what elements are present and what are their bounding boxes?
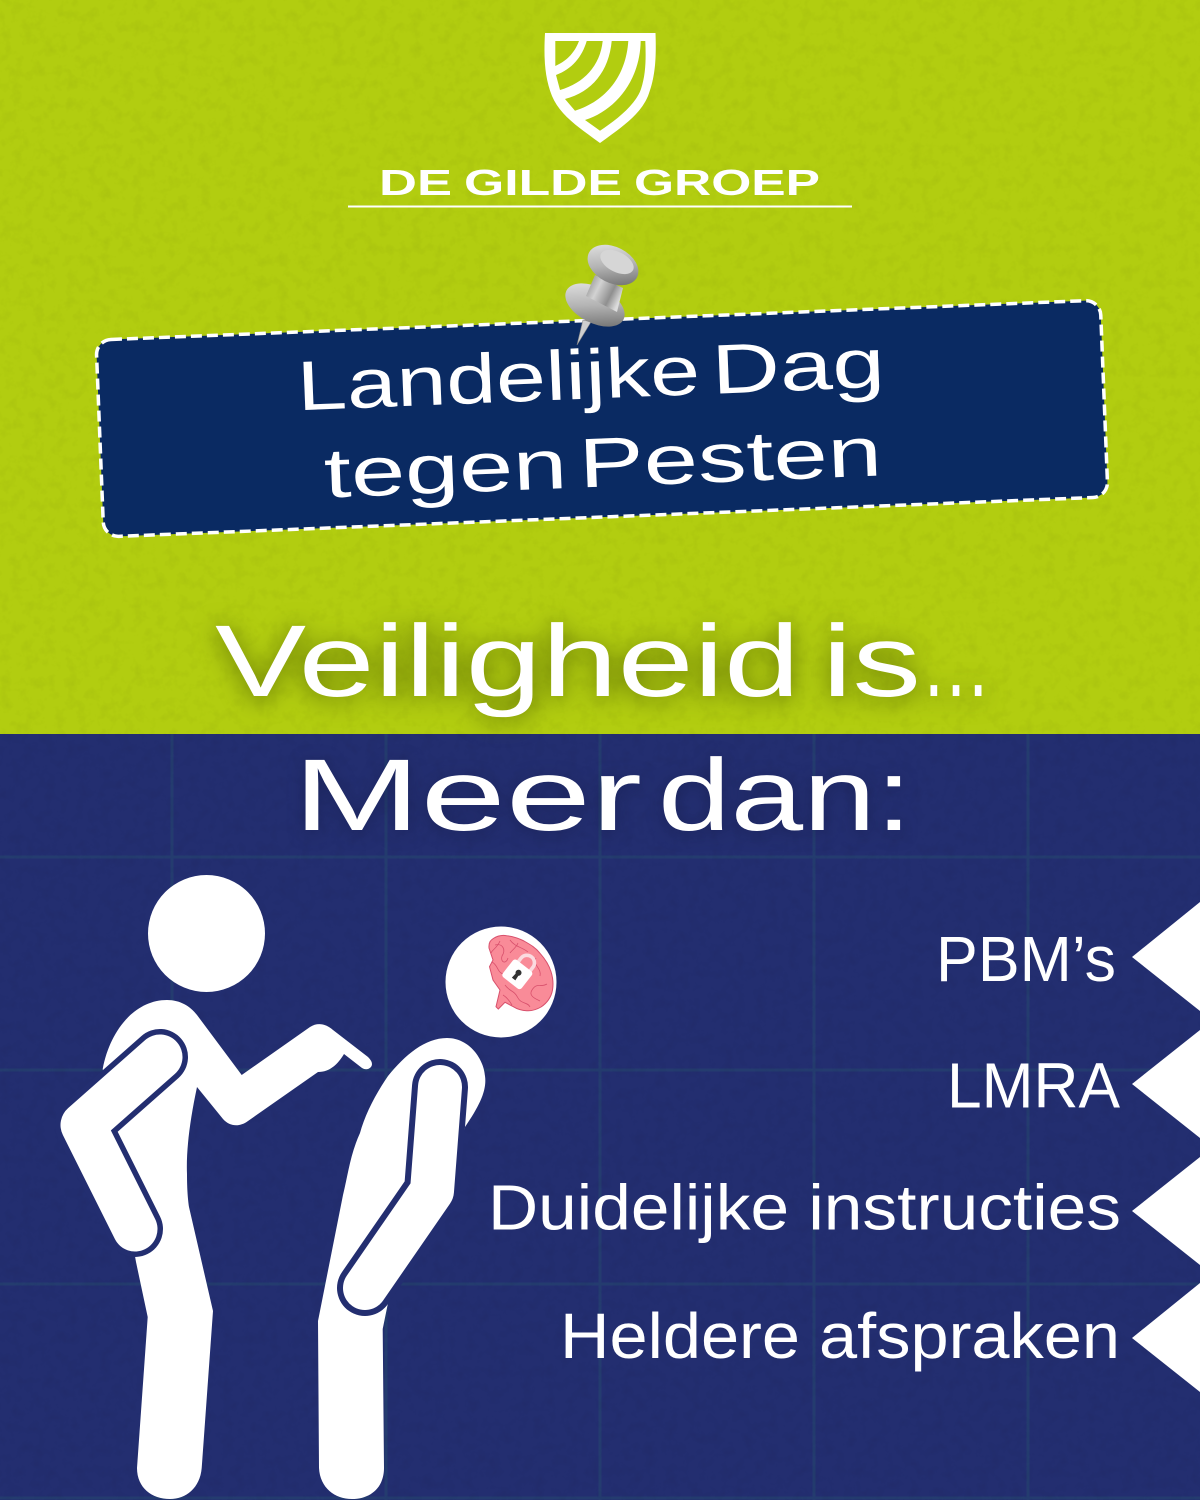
heading: Veiligheid is: Veiligheid bbox=[215, 604, 800, 718]
logo wordmark bbox=[379, 162, 820, 203]
icon: push pin bbox=[558, 237, 645, 345]
logo underline bbox=[348, 206, 852, 208]
label: Duidelijke instructies bbox=[488, 1172, 1121, 1244]
body bbox=[318, 1038, 485, 1499]
list item: LMRA bbox=[947, 1030, 1200, 1138]
label: PBM’s bbox=[936, 923, 1116, 995]
list item: Duidelijke instructies bbox=[488, 1157, 1200, 1265]
icon: shield bbox=[544, 33, 656, 143]
banner title: tegen bbox=[322, 425, 568, 513]
banner title: Landelijke bbox=[295, 331, 701, 425]
figure: person pointing bbox=[83, 875, 372, 1499]
label: LMRA bbox=[947, 1050, 1120, 1122]
heading: Meer dan: Meer bbox=[293, 738, 642, 852]
logo wordmark: GROEP bbox=[634, 162, 820, 203]
head bbox=[148, 875, 265, 992]
heading: Veiligheid is: is bbox=[822, 604, 921, 718]
panel: pinned title banner bbox=[96, 300, 1108, 537]
arrow bbox=[1132, 1030, 1200, 1138]
padlock bbox=[501, 949, 541, 990]
arrow bbox=[1132, 1157, 1200, 1265]
list item: PBM's bbox=[936, 902, 1200, 1011]
heading: Veiligheid is bbox=[215, 604, 991, 718]
arm on hip bbox=[83, 1057, 160, 1229]
panel: navy bottom background bbox=[0, 734, 1200, 1500]
icon: brain with padlock bbox=[489, 935, 553, 1011]
logo wordmark: GILDE bbox=[464, 162, 622, 203]
banner title bbox=[295, 324, 890, 514]
banner background bbox=[96, 300, 1108, 537]
heading: Meer dan: dan: bbox=[658, 738, 912, 852]
figure: bullied person bent over bbox=[318, 926, 556, 1499]
banner title: Dag bbox=[710, 324, 886, 409]
arrow bbox=[1132, 902, 1200, 1011]
logo: De Gilde Groep bbox=[348, 33, 852, 208]
logo wordmark: DE bbox=[379, 162, 452, 203]
heading: Veiligheid is: … bbox=[921, 604, 991, 718]
banner title: Pesten bbox=[577, 412, 883, 502]
panel: green top background bbox=[0, 0, 1200, 734]
body bbox=[103, 1000, 372, 1499]
heading: Meer dan bbox=[293, 738, 912, 852]
arrow bbox=[1132, 1283, 1200, 1392]
list item: Heldere afspraken bbox=[560, 1283, 1200, 1392]
head bubble bbox=[446, 926, 556, 1038]
label: Heldere afspraken bbox=[560, 1300, 1120, 1372]
arm hanging bbox=[365, 1087, 440, 1288]
